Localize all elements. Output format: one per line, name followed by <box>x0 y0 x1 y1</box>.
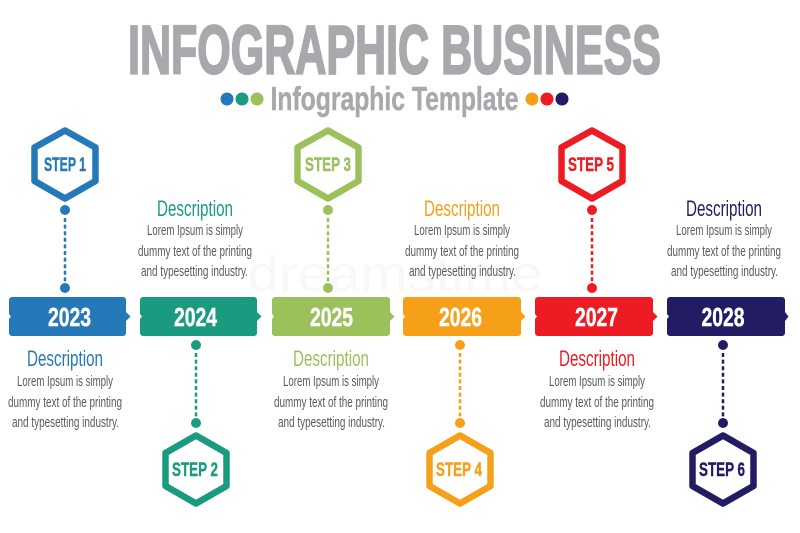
description 4: Lorem Ipsum is simply <box>414 222 510 239</box>
year 2027: 2027 <box>575 302 618 332</box>
connector 3 <box>323 205 333 293</box>
year 2026 <box>403 297 526 336</box>
description 1 <box>8 346 122 431</box>
icon: step 6 hexagon <box>692 436 754 504</box>
year 2025 <box>272 297 394 336</box>
step 4 column <box>403 196 526 504</box>
description 6 <box>667 196 781 280</box>
step 2 column <box>138 196 262 504</box>
description 1: Description <box>27 346 103 371</box>
description 4: dummy text of the printing <box>405 243 519 260</box>
description 5 <box>540 346 654 431</box>
description 3: Lorem Ipsum is simply <box>283 373 379 390</box>
step 1 column <box>8 130 130 431</box>
description 6: Description <box>686 196 762 221</box>
connector 5 <box>587 205 597 293</box>
icon: step 4 hexagon: STEP 4 <box>436 460 482 481</box>
description 2 <box>138 196 252 280</box>
icon: step 4 hexagon <box>430 436 490 504</box>
year 2026: 2026 <box>439 302 482 332</box>
description 2: Description <box>157 196 233 221</box>
description 2: Lorem Ipsum is simply <box>147 222 243 239</box>
description 3 <box>274 346 388 431</box>
icon: step 3 hexagon <box>298 130 358 198</box>
connector 6 <box>718 340 728 428</box>
icon: step 1 hexagon: STEP 1 <box>44 155 86 176</box>
icon: step 5 hexagon <box>562 130 622 198</box>
year 2023: 2023 <box>48 302 91 332</box>
year 2023 <box>9 297 130 336</box>
step 6 column <box>667 196 788 504</box>
description 4 <box>405 196 519 280</box>
description 3: Description <box>293 346 369 371</box>
description 3: and typesetting industry. <box>278 414 385 431</box>
year 2028 <box>667 297 788 336</box>
left decorative dots <box>220 92 264 106</box>
description 5: dummy text of the printing <box>540 394 654 411</box>
step 3 column <box>272 130 394 431</box>
description 3: dummy text of the printing <box>274 394 388 411</box>
description 4: Description <box>424 196 500 221</box>
description 4: and typesetting industry. <box>409 263 516 280</box>
description 2: and typesetting industry. <box>141 263 248 280</box>
icon: step 1 hexagon <box>34 130 96 198</box>
subtitle: Infographic Template <box>270 80 518 117</box>
description 2: dummy text of the printing <box>138 243 252 260</box>
description 1: and typesetting industry. <box>12 414 119 431</box>
right decorative dots <box>526 92 568 106</box>
watermark: dreamstime <box>248 246 542 302</box>
year 2027 <box>535 297 658 336</box>
icon: step 5 hexagon: STEP 5 <box>568 155 614 176</box>
connector 2 <box>191 340 201 428</box>
icon: step 3 hexagon: STEP 3 <box>305 155 351 176</box>
description 5: Lorem Ipsum is simply <box>549 373 645 390</box>
connector 4 <box>455 340 465 428</box>
description 1: dummy text of the printing <box>8 394 122 411</box>
icon: step 2 hexagon: STEP 2 <box>172 460 218 481</box>
step 5 column <box>535 130 658 431</box>
year 2028: 2028 <box>702 302 744 332</box>
year 2024 <box>140 297 262 336</box>
description 5: and typesetting industry. <box>544 414 651 431</box>
icon: step 6 hexagon: STEP 6 <box>699 460 745 481</box>
connector 1 <box>60 205 70 293</box>
description 1: Lorem Ipsum is simply <box>17 373 113 390</box>
description 5: Description <box>559 346 635 371</box>
year 2025: 2025 <box>310 302 353 332</box>
year 2024: 2024 <box>174 302 217 332</box>
icon: step 2 hexagon <box>166 436 226 504</box>
